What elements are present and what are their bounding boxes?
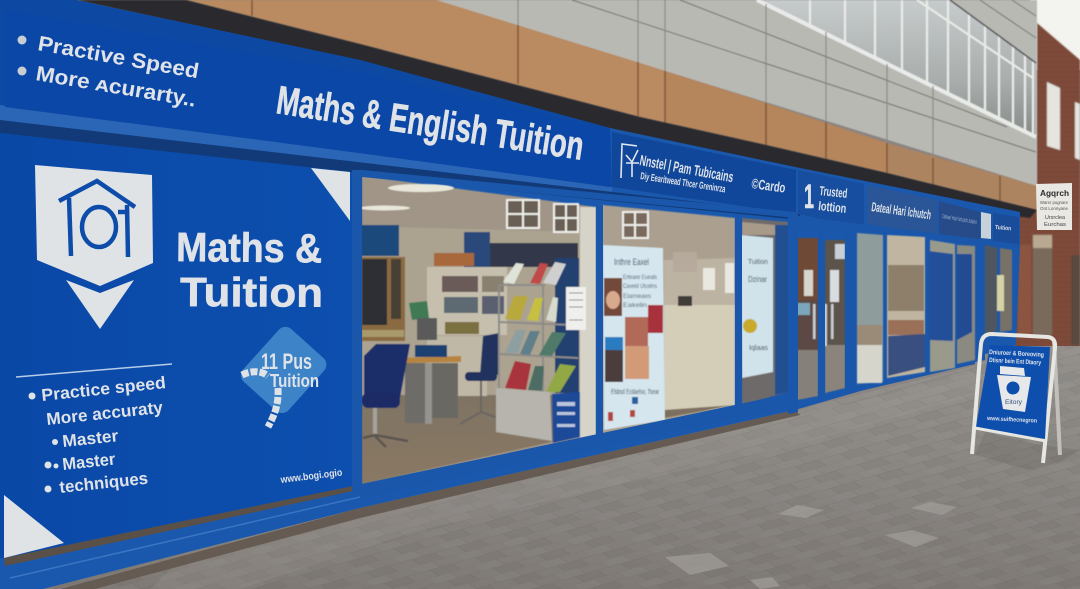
panel bullet list: techniques [58,469,149,497]
reflected window [623,212,648,238]
hanging sign on the brick wall: Agqrch [1040,189,1069,198]
panel bullet list [28,373,167,497]
icon: 11 plus tuition diamond: Tuition [270,371,319,391]
third window with poster [741,218,788,405]
green display books [409,301,437,340]
left shelving [361,257,405,341]
hanging sign on the brick wall: Ont Lonnyane [1040,206,1068,211]
pavement [43,346,1080,589]
brick building on the right [1015,23,1080,350]
second window interior [602,205,735,438]
panel bullet list: Master [61,426,119,451]
corner triangle top right [311,168,350,221]
panel web address: www.bogi.ogio [279,468,343,486]
icon: house shield logo [35,165,153,329]
blue wall panels [361,225,399,256]
hanging sign on the brick wall: Ursrclea [1045,215,1066,221]
fascia heading: Maths & English Tuition [274,78,587,169]
large numeral: 1 [804,178,814,216]
right chair [460,333,499,424]
third window with poster: Iqlaas [749,345,768,352]
book stand [496,262,580,443]
blue mullions and frame bars [352,170,1018,498]
icon: 11 plus tuition diamond: 11 Pus [261,349,312,374]
third window with poster: Dzinar [748,275,767,284]
tuition text: Iottion [818,198,847,216]
fascia main sign panel [5,10,610,187]
poster in second window: Caveld Utcelns [623,284,657,290]
a-board sign [972,334,1080,470]
icon: logo mark [621,144,639,178]
white shelving [427,253,507,396]
sign panel: further signs to the right [867,185,1019,245]
icon: 11 plus tuition diamond [237,323,330,427]
bullet dots [18,36,26,76]
a-board sign: Dtisnr bein Ent Dtaory [989,357,1041,367]
hanging sign on the brick wall: Eurchas [1044,222,1066,228]
poster in second window: Erteaxe Eueals [623,275,657,281]
third window with poster: Tuition [748,259,768,266]
kerb [60,410,800,589]
panel bullet list: Master [61,450,116,474]
main window interior [360,176,596,484]
sign name: Nnstel | Pam Tubicains [638,152,735,186]
trusted text: Trusted [819,183,848,201]
hanging sign on the brick wall [1036,183,1072,230]
corner triangle bottom left [4,495,64,558]
sign panel: trusted tuition [798,170,864,228]
a-board heading: Dniuroer & Boreoving [989,349,1044,359]
upper facade: grey cladding, window band and orange band [186,0,1037,210]
right-hand shop windows [857,233,1012,384]
soffit shadow under the cladding [76,0,1037,218]
sign panel: further signs to the right: Tuition [995,225,1012,232]
sign panel: further signs to the right: Dateal Hari lchutch [871,199,932,222]
desk [402,345,461,424]
sign subtitle: Diy Eearitwead Thcer Greninrza [640,171,726,195]
panel heading: maths and: Maths & [176,224,322,272]
navy wall behind stand [555,258,579,393]
sign logo text: ©Cardo [751,175,786,196]
reflected windows [507,200,578,232]
light band of worn paving by the kerb [150,372,975,589]
sky [1030,0,1080,70]
icon: cup: Eitory [1005,399,1023,406]
upper windows [757,0,1035,137]
left window graphic panel [0,133,353,566]
panel bullet list: Practice speed [40,373,167,405]
left chair [362,344,410,447]
double doors [797,238,845,400]
fascia slogan: practive speed: Practive Speed [36,32,201,83]
paper note [566,287,586,330]
poster in second window: Eiarneaxs [623,294,651,300]
sign panel: further signs to the right: Dateal Hari lchutch tuition [942,214,977,226]
a-board web address: www.suifhecnegron [986,416,1037,425]
ceiling lights [360,184,454,210]
hanging sign on the brick wall: Warer pugnare [1040,200,1068,205]
poster in second window: Inthre Eaxel [614,257,649,267]
orange band [186,0,1037,210]
poster in second window: Eakelin [623,303,647,309]
fascia slogan: more accuracy: More ᴀcurarty.. [34,62,198,112]
panel bullet list: More accuraty [45,398,164,429]
panel heading: tuition: Tuition [180,269,323,316]
poster in second window [603,245,665,430]
sign panel: institute name [612,132,796,214]
poster in second window: Elsbsd Ecdaelso, Tsear [611,389,659,396]
